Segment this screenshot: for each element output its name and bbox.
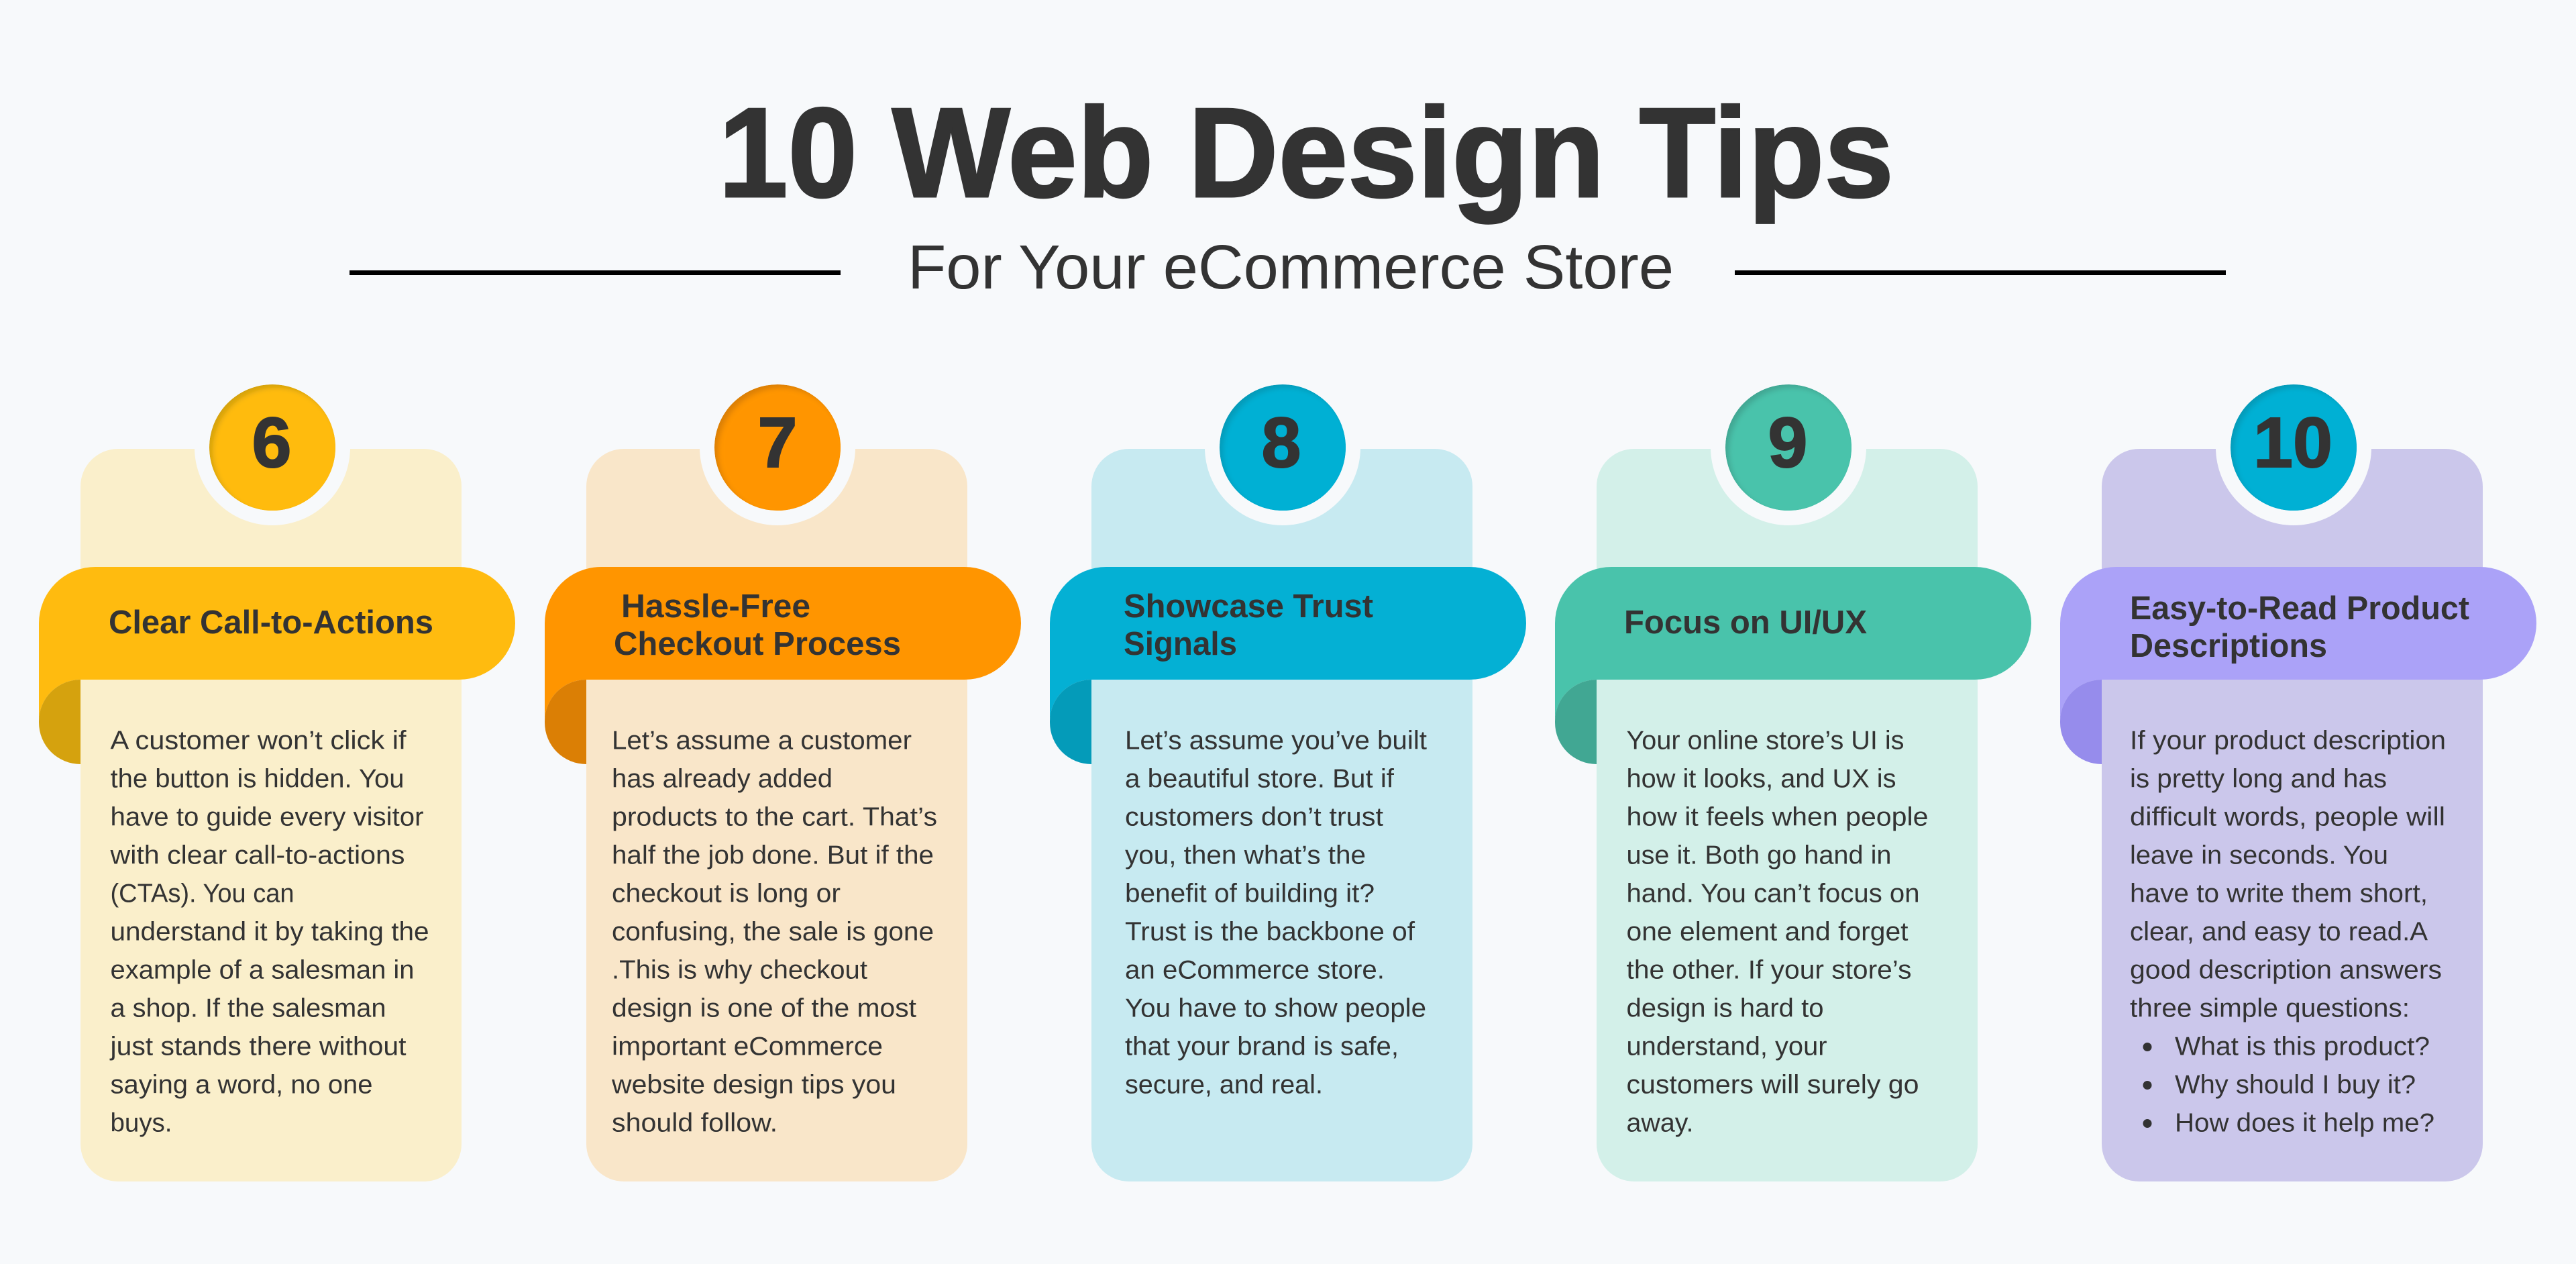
heading: Hassle-Free [621,588,810,625]
panel background [1597,449,1978,1181]
card 7: Hassle-Free Checkout Process [545,370,1021,1181]
number badge 6: 6 [252,403,291,482]
body text: is pretty long and has [2130,765,2387,794]
body text: should follow. [612,1109,777,1138]
card 10: Easy-to-Read Product Descriptions [2060,370,2536,1181]
subtitle [350,232,2226,302]
bullet list: How does it help me? [2175,1109,2434,1138]
body text: just stands there without [109,1033,407,1061]
body text: You have to show people [1125,994,1426,1023]
body text: customers will surely go [1626,1071,1919,1100]
body text: the other. If your store’s [1626,956,1912,985]
body text: design is one of the most [612,994,916,1023]
body text: buys. [110,1109,172,1138]
body text: use it. Both go hand in [1626,841,1892,870]
body text [1626,727,1928,1138]
body text: If your product description [2130,727,2446,755]
ribbon [2060,567,2536,764]
body text: you, then what’s the [1125,841,1366,870]
heading [614,588,901,662]
body text: good description answers [2130,956,2442,985]
heading: Descriptions [2130,628,2327,664]
body text: secure, and real. [1125,1071,1323,1100]
number badge 8: 8 [1262,403,1301,482]
ribbon [1555,567,2031,764]
number badge 9: 9 [1768,403,1807,482]
body text: three simple questions: [2130,994,2410,1023]
body text: A customer won’t click if [110,727,407,755]
heading: Easy-to-Read Product [2130,590,2469,627]
body text [611,727,937,1138]
body text: Let’s assume you’ve built [1125,727,1427,755]
body text: website design tips you [611,1071,896,1100]
ribbon [1050,567,1526,764]
panel background [1091,449,1472,1181]
body text: have to write them short, [2130,880,2428,908]
body text: confusing, the sale is gone [612,918,934,947]
title: 10 Web Design Tips [718,82,1894,224]
body text [2130,727,2446,1023]
heading: Checkout Process [614,626,901,662]
body text: half the job done. But if the [612,841,934,870]
body text: how it looks, and UX is [1626,765,1896,794]
bullet list [2143,1033,2434,1138]
body text: (CTAs). You can [110,880,294,908]
number badge 10: 10 [2253,403,2332,482]
bullet list: Why should I buy it? [2175,1071,2416,1100]
panel background [2102,449,2483,1181]
body text [1125,727,1427,1100]
body text: have to guide every visitor [110,803,424,832]
number badge 8 [1205,370,1360,525]
body text: hand. You can’t focus on [1626,880,1920,908]
body text: example of a salesman in [110,956,415,985]
body text: customers don’t trust [1125,803,1383,832]
card 8: Showcase Trust Signals [1050,370,1526,1181]
body text: checkout is long or [612,880,841,908]
body text: benefit of building it? [1125,880,1375,908]
body text: Let’s assume a customer [612,727,912,755]
ribbon [545,567,1021,764]
body text: the button is hidden. You [110,765,404,794]
body text [109,727,429,1138]
heading: Focus on UI/UX [1624,604,1867,641]
heading: Signals [1124,626,1237,662]
body text: has already added [612,765,833,794]
body text: Trust is the backbone of [1125,918,1415,947]
number badge 7 [700,370,855,525]
body text: that your brand is safe, [1125,1033,1399,1061]
body text: clear, and easy to read.A [2130,918,2428,947]
body text: Your online store’s UI is [1626,727,1904,755]
subtitle: For Your eCommerce Store [908,232,1674,302]
body text: how it feels when people [1626,803,1928,832]
body text: understand, your [1626,1033,1827,1061]
body text: products to the cart. That’s [612,803,937,832]
body text: difficult words, people will [2130,803,2445,832]
number badge 10 [2216,370,2371,525]
body text: leave in seconds. You [2130,841,2388,870]
number badge 7: 7 [758,403,797,482]
body text: .This is why checkout [612,956,867,985]
heading: Clear Call-to-Actions [109,604,433,641]
body text: a beautiful store. But if [1125,765,1394,794]
body text: a shop. If the salesman [110,994,386,1023]
heading [2130,590,2469,664]
body text: design is hard to [1626,994,1823,1023]
number badge 9 [1711,370,1866,525]
body text: understand it by taking the [110,918,429,947]
panel background [586,449,967,1181]
body text: important eCommerce [612,1033,883,1061]
panel background [80,449,462,1181]
body text: an eCommerce store. [1125,956,1385,985]
body text: away. [1626,1109,1693,1138]
body text: saying a word, no one [110,1071,373,1100]
ribbon [39,567,515,764]
card 6: Clear Call-to-Actions [39,370,515,1181]
card 9: Focus on UI/UX [1555,370,2031,1181]
heading [1124,588,1373,662]
bullet list: What is this product? [2175,1033,2430,1061]
body text: with clear call-to-actions [109,841,405,870]
body text: one element and forget [1626,918,1909,947]
number badge 6 [195,370,350,525]
heading: Showcase Trust [1124,588,1373,625]
